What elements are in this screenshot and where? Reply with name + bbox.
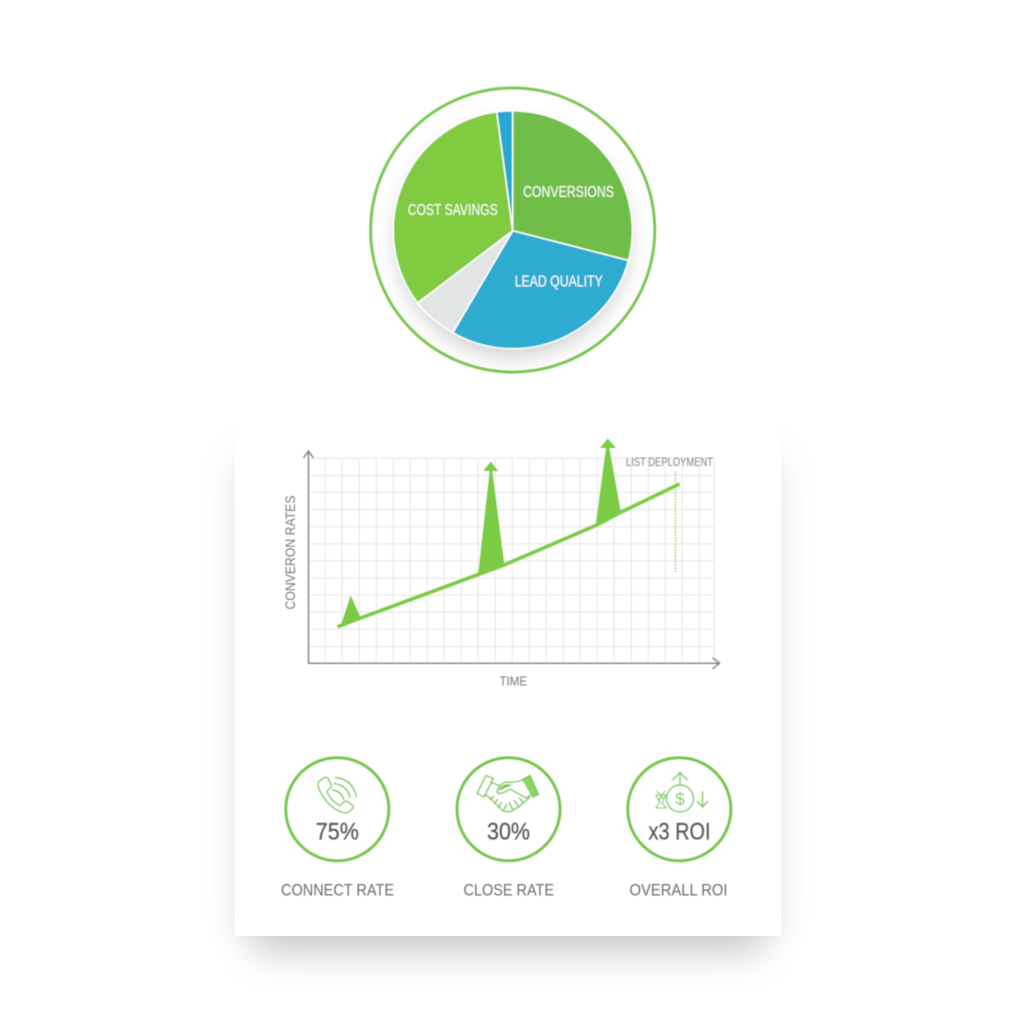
- value: x3 ROI: x3 ROI: [648, 818, 710, 846]
- value: 75%: 75%: [316, 818, 359, 846]
- slice: grey remainder: [418, 231, 513, 333]
- roi circle: [628, 758, 731, 861]
- connect circle: [286, 758, 389, 861]
- label: lead quality: LEAD QUALITY: [515, 274, 603, 290]
- label: close rate: CLOSE RATE: [464, 882, 554, 900]
- stat: close rate: [457, 758, 560, 900]
- slice: conversions: [513, 111, 632, 260]
- stat: connect rate: [281, 758, 394, 900]
- spike 3 with arrow: [596, 438, 621, 526]
- pie shadow: [397, 124, 629, 356]
- list deployment label: LIST DEPLOYMENT: [626, 457, 713, 469]
- stat: overall roi: [628, 758, 731, 900]
- icon: handshake: [477, 776, 538, 812]
- label: connect rate: CONNECT RATE: [281, 882, 394, 900]
- label: overall roi: OVERALL ROI: [630, 882, 728, 900]
- close circle: [457, 758, 560, 861]
- pie outer ring: [371, 88, 655, 372]
- label: conversions: CONVERSIONS: [523, 184, 614, 201]
- line chart: [283, 438, 720, 688]
- spike 2 with arrow: [478, 462, 504, 576]
- panel: pie chart: [371, 88, 655, 372]
- panel: results card: [228, 405, 788, 952]
- chart grid: [308, 458, 714, 663]
- x axis label: TIME: [500, 674, 527, 688]
- slice: lead quality: [453, 231, 629, 349]
- value: 30%: 30%: [487, 818, 530, 846]
- spike 1: [338, 596, 361, 627]
- icon: phone: [318, 777, 356, 813]
- label: cost savings: COST SAVINGS: [408, 202, 498, 219]
- dotted deployment marker: [674, 472, 676, 572]
- slice: small blue: [497, 111, 513, 231]
- y axis label: CONVERON RATES: [283, 496, 298, 610]
- icon: dollar with arrows: $: [675, 790, 685, 808]
- icon: dollar with arrows: [656, 772, 708, 812]
- axes: [304, 451, 720, 669]
- slice: cost savings: [393, 112, 513, 303]
- trend line: [338, 484, 680, 627]
